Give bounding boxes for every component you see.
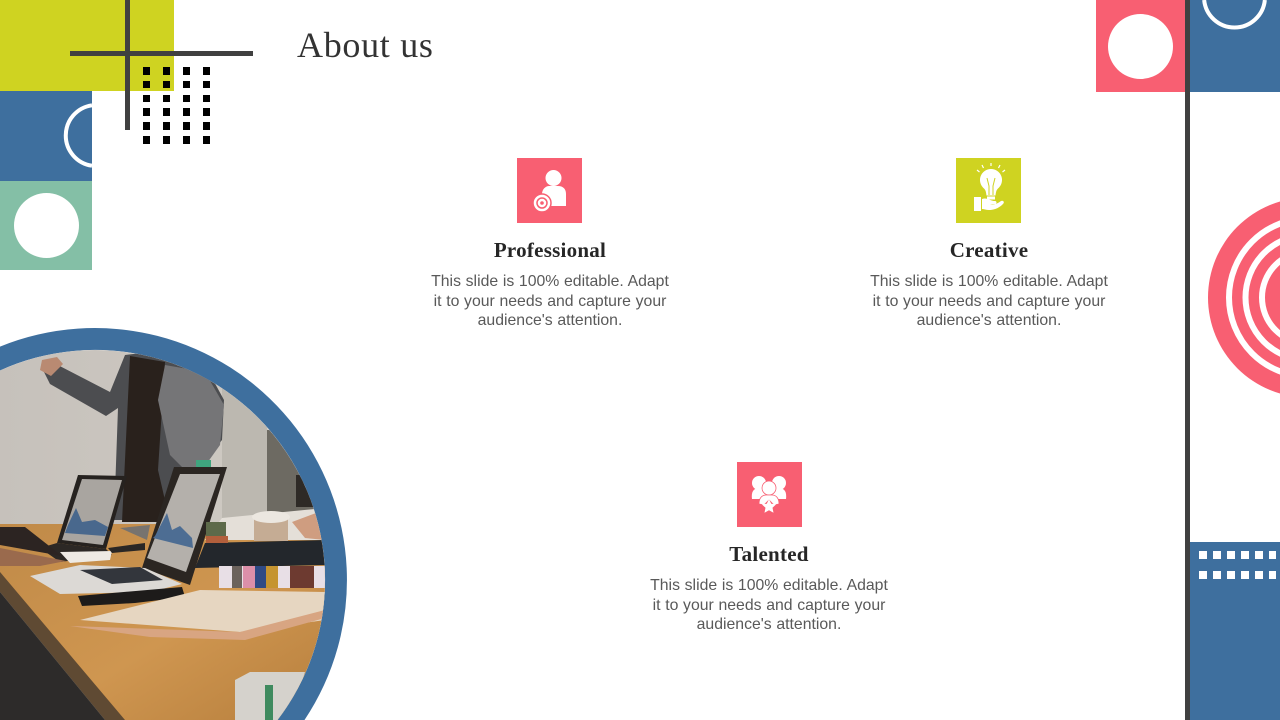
concentric coral circle — [1208, 198, 1280, 398]
description — [650, 577, 888, 633]
table — [0, 524, 325, 720]
description: This slide is 100% editable. Adapt — [431, 273, 669, 290]
blue square with ring — [1189, 0, 1280, 92]
description: audience's attention. — [917, 312, 1061, 329]
heading: Professional — [494, 238, 606, 262]
presenter — [44, 352, 224, 520]
folders — [80, 590, 325, 632]
description — [431, 273, 669, 329]
description: it to your needs and capture your — [434, 292, 666, 310]
icon: person with gear — [517, 158, 582, 223]
circular meeting photo — [0, 328, 347, 720]
icon: light bulb over hand — [956, 158, 1021, 223]
card: Creative — [870, 158, 1108, 329]
description: This slide is 100% editable. Adapt — [650, 577, 888, 594]
yellow-green square — [0, 0, 174, 91]
coral square with circle — [1096, 0, 1186, 92]
striped books — [219, 566, 325, 588]
vertical divider — [1185, 0, 1190, 720]
description: audience's attention. — [478, 312, 622, 329]
heading: Creative — [950, 238, 1028, 262]
crossing lines — [70, 0, 253, 130]
right side items — [205, 508, 325, 540]
front laptop — [142, 467, 227, 585]
dot grid — [143, 67, 210, 144]
card: Talented — [650, 462, 888, 633]
description: it to your needs and capture your — [873, 292, 1105, 310]
blue square with ring — [0, 91, 92, 181]
description: it to your needs and capture your — [653, 596, 885, 614]
description: This slide is 100% editable. Adapt — [870, 273, 1108, 290]
cup in foreground — [235, 672, 305, 720]
description — [870, 273, 1108, 329]
heading: Talented — [729, 542, 809, 566]
green square with circle — [0, 181, 92, 270]
description: audience's attention. — [697, 616, 841, 633]
photo content — [0, 345, 330, 720]
tablet and notes at left — [0, 527, 48, 554]
blue block with white squares — [1189, 542, 1280, 720]
icon: group with star — [737, 462, 802, 527]
blue ring — [0, 328, 347, 720]
decorative shapes: right side — [1096, 0, 1280, 720]
card: Professional — [431, 158, 669, 329]
back laptop — [57, 475, 127, 549]
decorative shapes: top left — [0, 0, 253, 270]
title: About us — [297, 24, 434, 64]
